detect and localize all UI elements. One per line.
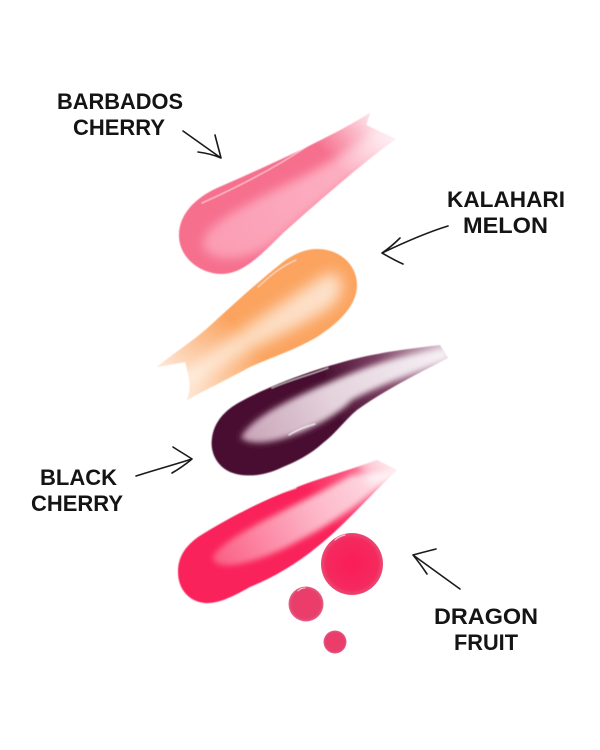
- swatch: Kalahari Melon: [157, 248, 358, 400]
- label: Dragon Fruit: FRUIT: [454, 630, 519, 655]
- label: Dragon Fruit: DRAGON: [434, 604, 538, 629]
- swatch: Dragon Fruit: [177, 460, 396, 604]
- label: Kalahari Melon: MELON: [463, 213, 548, 238]
- arrow: Dragon Fruit: [413, 549, 460, 589]
- label: Barbados Cherry: [57, 89, 183, 140]
- swatch: Black Cherry: [210, 344, 448, 476]
- label: Barbados Cherry: BARBADOS: [57, 89, 183, 114]
- arrow: Kalahari Melon: [382, 226, 448, 264]
- label: Barbados Cherry: CHERRY: [73, 115, 165, 140]
- swatch: Barbados Cherry: [178, 113, 395, 275]
- drop: large: [321, 533, 383, 595]
- label: Black Cherry: [31, 465, 123, 516]
- label: Kalahari Melon: [447, 187, 565, 238]
- label: Black Cherry: BLACK: [40, 465, 117, 490]
- drop: medium: [288, 586, 324, 622]
- label: Dragon Fruit: [434, 604, 538, 655]
- arrow: Black Cherry: [136, 447, 192, 476]
- drop: small: [324, 630, 346, 654]
- label: Black Cherry: CHERRY: [31, 491, 123, 516]
- label: Kalahari Melon: KALAHARI: [447, 187, 565, 212]
- arrow: Barbados Cherry: [183, 131, 221, 158]
